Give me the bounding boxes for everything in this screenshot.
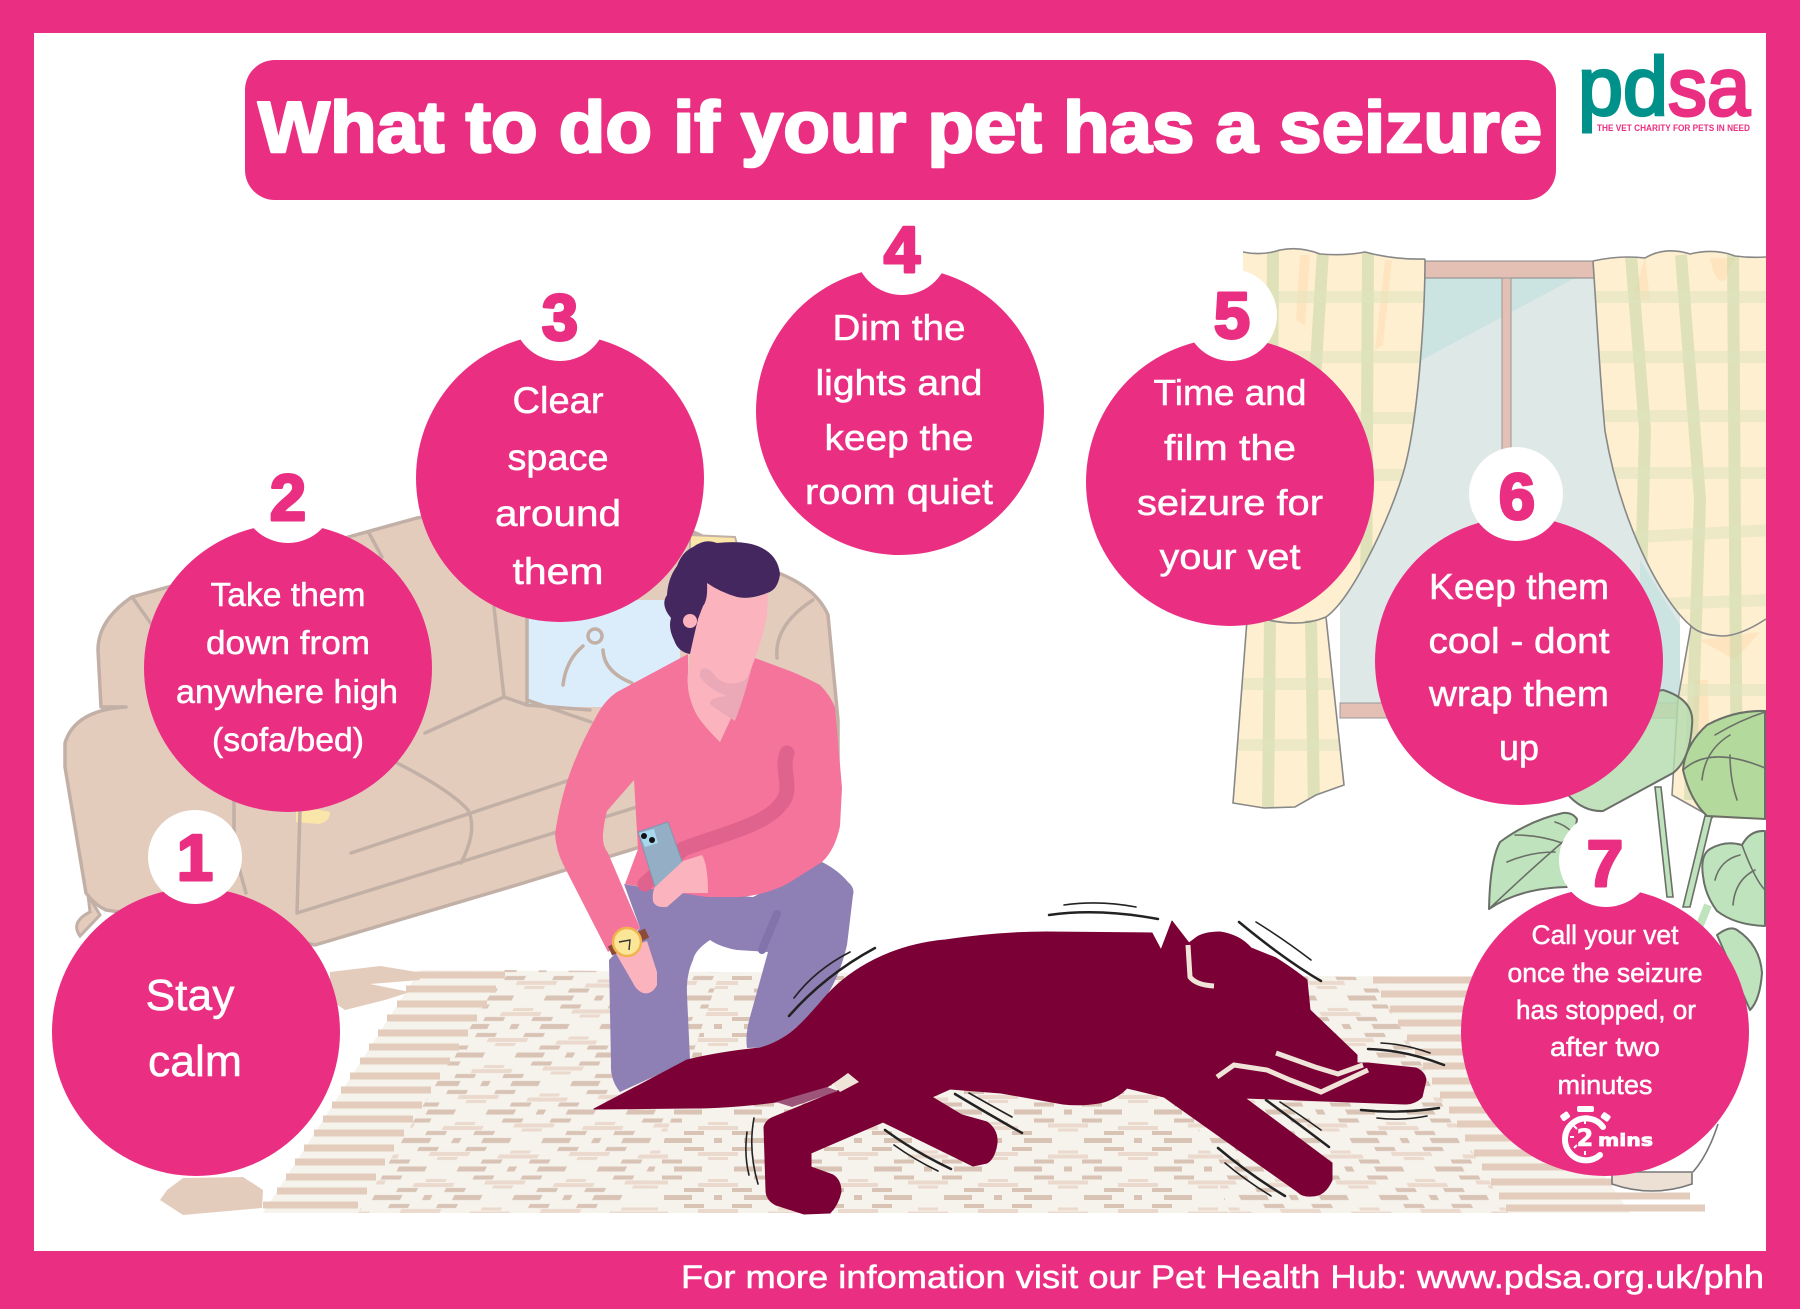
watch (610, 928, 647, 956)
step 1: Stay (146, 971, 234, 1020)
step 2 (144, 449, 432, 812)
step 2: (sofa/bed) (212, 721, 364, 758)
step 5: your vet (1160, 536, 1300, 577)
hand holding phone (653, 855, 708, 907)
illustration: left curtain (1230, 249, 1430, 810)
illustration: rug (160, 966, 1705, 1215)
step 1 (52, 810, 340, 1176)
pdsa logo: pd (1578, 40, 1668, 133)
step 7 (1461, 813, 1749, 1176)
step 3: around (495, 493, 621, 534)
step 3: Clear (512, 380, 604, 421)
motion lines around dog (746, 903, 1444, 1196)
plant pot (1580, 1100, 1720, 1175)
step 5: Time and (1154, 372, 1306, 413)
step 2: 2 (270, 461, 306, 534)
step 7: 7 (1587, 827, 1623, 900)
step 4: Dim the (832, 307, 966, 348)
pdsa logo (1578, 40, 1751, 133)
step 4: room quiet (805, 471, 993, 512)
step 2: anywhere high (176, 673, 398, 710)
lower hand (615, 941, 657, 993)
step 7: minutes (1558, 1070, 1652, 1100)
illustration: kneeling person (555, 541, 853, 1092)
step 3 (416, 267, 704, 622)
step 7: has stopped, or (1516, 995, 1696, 1025)
step 5: seizure for (1137, 482, 1323, 523)
hair (664, 541, 780, 654)
illustration: plant (1489, 690, 1765, 1191)
step 6: cool - dont (1428, 620, 1610, 661)
step 3: them (512, 551, 604, 592)
step 6: Keep them (1429, 566, 1609, 607)
icon: two minute stopwatch (1559, 1106, 1653, 1160)
title text: What to do if your pet has a seizure (258, 88, 1542, 168)
step 7: after two (1550, 1032, 1660, 1062)
trousers (609, 862, 853, 1092)
step 6 (1375, 447, 1663, 805)
phone (638, 822, 683, 887)
step 5: film the (1164, 427, 1296, 468)
step 4 (756, 201, 1044, 555)
illustration: dog silhouette (594, 921, 1426, 1214)
pdsa logo: sa (1668, 40, 1751, 133)
face and neck (688, 583, 768, 742)
step 4: 4 (884, 213, 920, 286)
sweater (555, 654, 842, 952)
step 3: space (508, 437, 608, 478)
step 4: lights and (816, 362, 982, 403)
footer link text: For more infomation visit our Pet Health Hub: www.pdsa.org.uk/phh (681, 1259, 1764, 1295)
step 5 (1086, 269, 1374, 626)
step 1: 1 (177, 821, 213, 894)
step 6: wrap them (1428, 673, 1609, 714)
step 6: up (1499, 727, 1539, 768)
icon: two minute stopwatch: 2 (1577, 1124, 1593, 1152)
step 1: calm (148, 1037, 242, 1086)
step 7: Call your vet (1532, 920, 1679, 950)
step 2: Take them (210, 576, 366, 613)
illustration: right curtain (1590, 251, 1770, 820)
pdsa logo: THE VET CHARITY FOR PETS IN NEED (1597, 123, 1750, 133)
illustration: sofa (65, 490, 838, 945)
step 2: down from (206, 624, 370, 661)
step 5: 5 (1214, 279, 1250, 352)
dog ear and mouth highlights (1188, 945, 1368, 1092)
icon: two minute stopwatch: mins (1598, 1131, 1653, 1151)
step 6: 6 (1499, 460, 1535, 533)
step 7: once the seizure (1508, 958, 1702, 988)
step 4: keep the (824, 417, 974, 458)
step 3: 3 (542, 281, 578, 354)
title banner (245, 60, 1556, 200)
illustration: window (1340, 261, 1680, 718)
